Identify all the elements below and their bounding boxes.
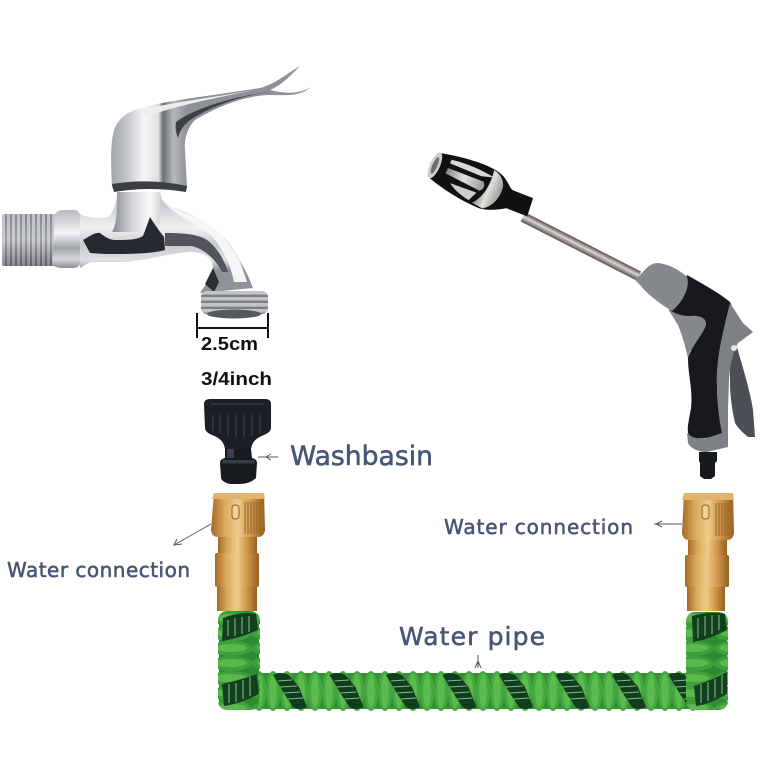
right lower <box>687 587 725 611</box>
black tap adapter <box>204 399 271 484</box>
green hose <box>218 611 728 711</box>
spray gun connector <box>699 452 717 479</box>
label: 3/4inch: 3/4inch <box>201 369 272 389</box>
label: left water connection: Water connection <box>7 558 190 582</box>
faucet outlet thread <box>201 291 268 318</box>
faucet hex nut <box>52 210 81 268</box>
spray gun head <box>422 144 539 227</box>
spray gun <box>422 144 755 479</box>
spray gun rod <box>521 213 641 280</box>
label: 2.5cm: 2.5cm <box>201 334 258 354</box>
label: right water connection: Water connection <box>444 515 633 539</box>
spray gun collar <box>635 263 688 311</box>
right brass connector <box>682 493 734 611</box>
spray gun grip <box>670 275 733 438</box>
arrow: right water connection <box>654 521 682 527</box>
spray gun trigger <box>730 347 755 437</box>
faucet inlet thread <box>2 214 56 266</box>
left sleeve <box>215 553 259 587</box>
arrow: washbasin <box>258 454 278 460</box>
dimension bracket <box>197 313 268 338</box>
left collar <box>211 493 265 537</box>
left brass connector <box>211 493 265 611</box>
hose horizontal run <box>240 671 705 711</box>
left neck <box>218 537 257 553</box>
hose left riser <box>218 611 260 710</box>
right neck <box>688 540 727 555</box>
label: Washbasin: Washbasin <box>290 441 433 472</box>
arrow: left water connection <box>174 524 211 545</box>
left lower <box>217 587 257 611</box>
label: Water pipe: Water pipe <box>399 622 545 651</box>
hose right riser <box>686 612 728 710</box>
arrow: water pipe <box>475 655 481 668</box>
spray gun grey panel <box>668 309 708 358</box>
faucet body <box>80 192 253 293</box>
right sleeve <box>685 555 729 587</box>
faucet handle <box>111 66 311 192</box>
faucet <box>2 66 311 318</box>
right collar <box>682 493 734 540</box>
spray gun grey frame <box>687 303 753 452</box>
